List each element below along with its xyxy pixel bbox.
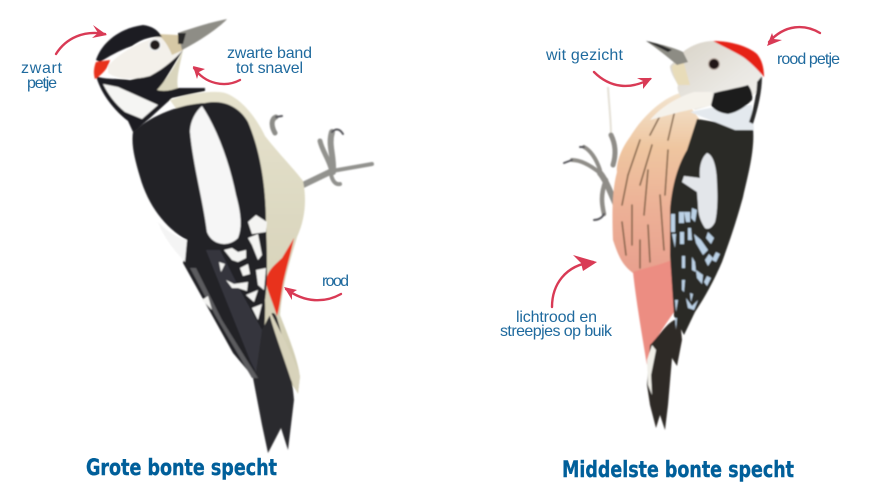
- dark back and wing: [670, 119, 753, 335]
- wing spots: [671, 208, 720, 330]
- pink underparts: [633, 260, 674, 365]
- belly streaks: [622, 110, 675, 268]
- face: [108, 36, 183, 79]
- label: rood: rood: [322, 273, 349, 290]
- wing bars: [202, 215, 267, 320]
- wing grey shading: [206, 250, 262, 372]
- eye: [708, 58, 720, 70]
- title: Middelste bonte specht: Middelste bonte specht: [562, 458, 794, 483]
- belly: [612, 93, 700, 273]
- white collar: [690, 105, 754, 130]
- left wing edge texture: [190, 268, 258, 378]
- arrow: lichtrood: [552, 255, 597, 307]
- white flank patch: [158, 222, 187, 262]
- arrow: wit gezicht: [594, 72, 652, 89]
- arrow: rood: [284, 287, 341, 300]
- bird: Grote bonte specht: [94, 19, 372, 453]
- throat buff: [157, 50, 183, 91]
- ear buff: [157, 34, 183, 55]
- title: Grote bonte specht: Grote bonte specht: [86, 456, 277, 481]
- left foot: [564, 135, 617, 220]
- stick feather line: [608, 87, 611, 135]
- belly and undertail: [170, 92, 305, 393]
- red cap: [713, 41, 764, 77]
- arrow: zwart petje: [56, 25, 107, 54]
- tail: [647, 318, 682, 430]
- label: rood petje: rood petje: [777, 51, 840, 68]
- throat shade: [672, 60, 690, 85]
- label: zwarte band tot snavel: [227, 45, 312, 77]
- head and neck: [670, 41, 763, 110]
- undertail cream edge: [267, 305, 300, 394]
- black neck patch: [711, 85, 752, 114]
- bill: [178, 19, 227, 50]
- white shoulder patch: [190, 106, 241, 244]
- label: lichtrood en streepjes op buik: streepjes op buik: [500, 323, 613, 340]
- nape line: [749, 76, 762, 124]
- tail: [253, 313, 294, 453]
- red nape: [94, 60, 110, 79]
- label: zwarte band tot snavel: zwarte band: [227, 45, 312, 62]
- neck band: [96, 50, 205, 132]
- label: wit gezicht: wit gezicht: [545, 47, 624, 64]
- label: zwart petje: petje: [27, 75, 57, 92]
- bill: [646, 41, 688, 65]
- red vent: [266, 238, 294, 316]
- white wing patch: [682, 153, 717, 229]
- label: lichtrood en streepjes op buik: [500, 309, 613, 340]
- black body and wing: [132, 102, 267, 378]
- label: zwart petje: [21, 60, 63, 92]
- white neck patch: [103, 84, 158, 119]
- far foot: [272, 116, 282, 133]
- undertail white edge: [647, 345, 656, 395]
- neck white streak: [650, 92, 712, 120]
- label: lichtrood en streepjes op buik: lichtrood en: [516, 309, 597, 326]
- arrow: rood petje: [767, 27, 820, 46]
- label: zwarte band tot snavel: tot snavel: [236, 60, 303, 77]
- eye: [148, 38, 162, 52]
- raised foot: [303, 130, 372, 185]
- bird: Middelste bonte specht: [564, 41, 764, 430]
- label: zwart petje: zwart: [21, 60, 63, 77]
- black cap: [96, 25, 162, 62]
- arrow: zwarte band: [193, 66, 240, 84]
